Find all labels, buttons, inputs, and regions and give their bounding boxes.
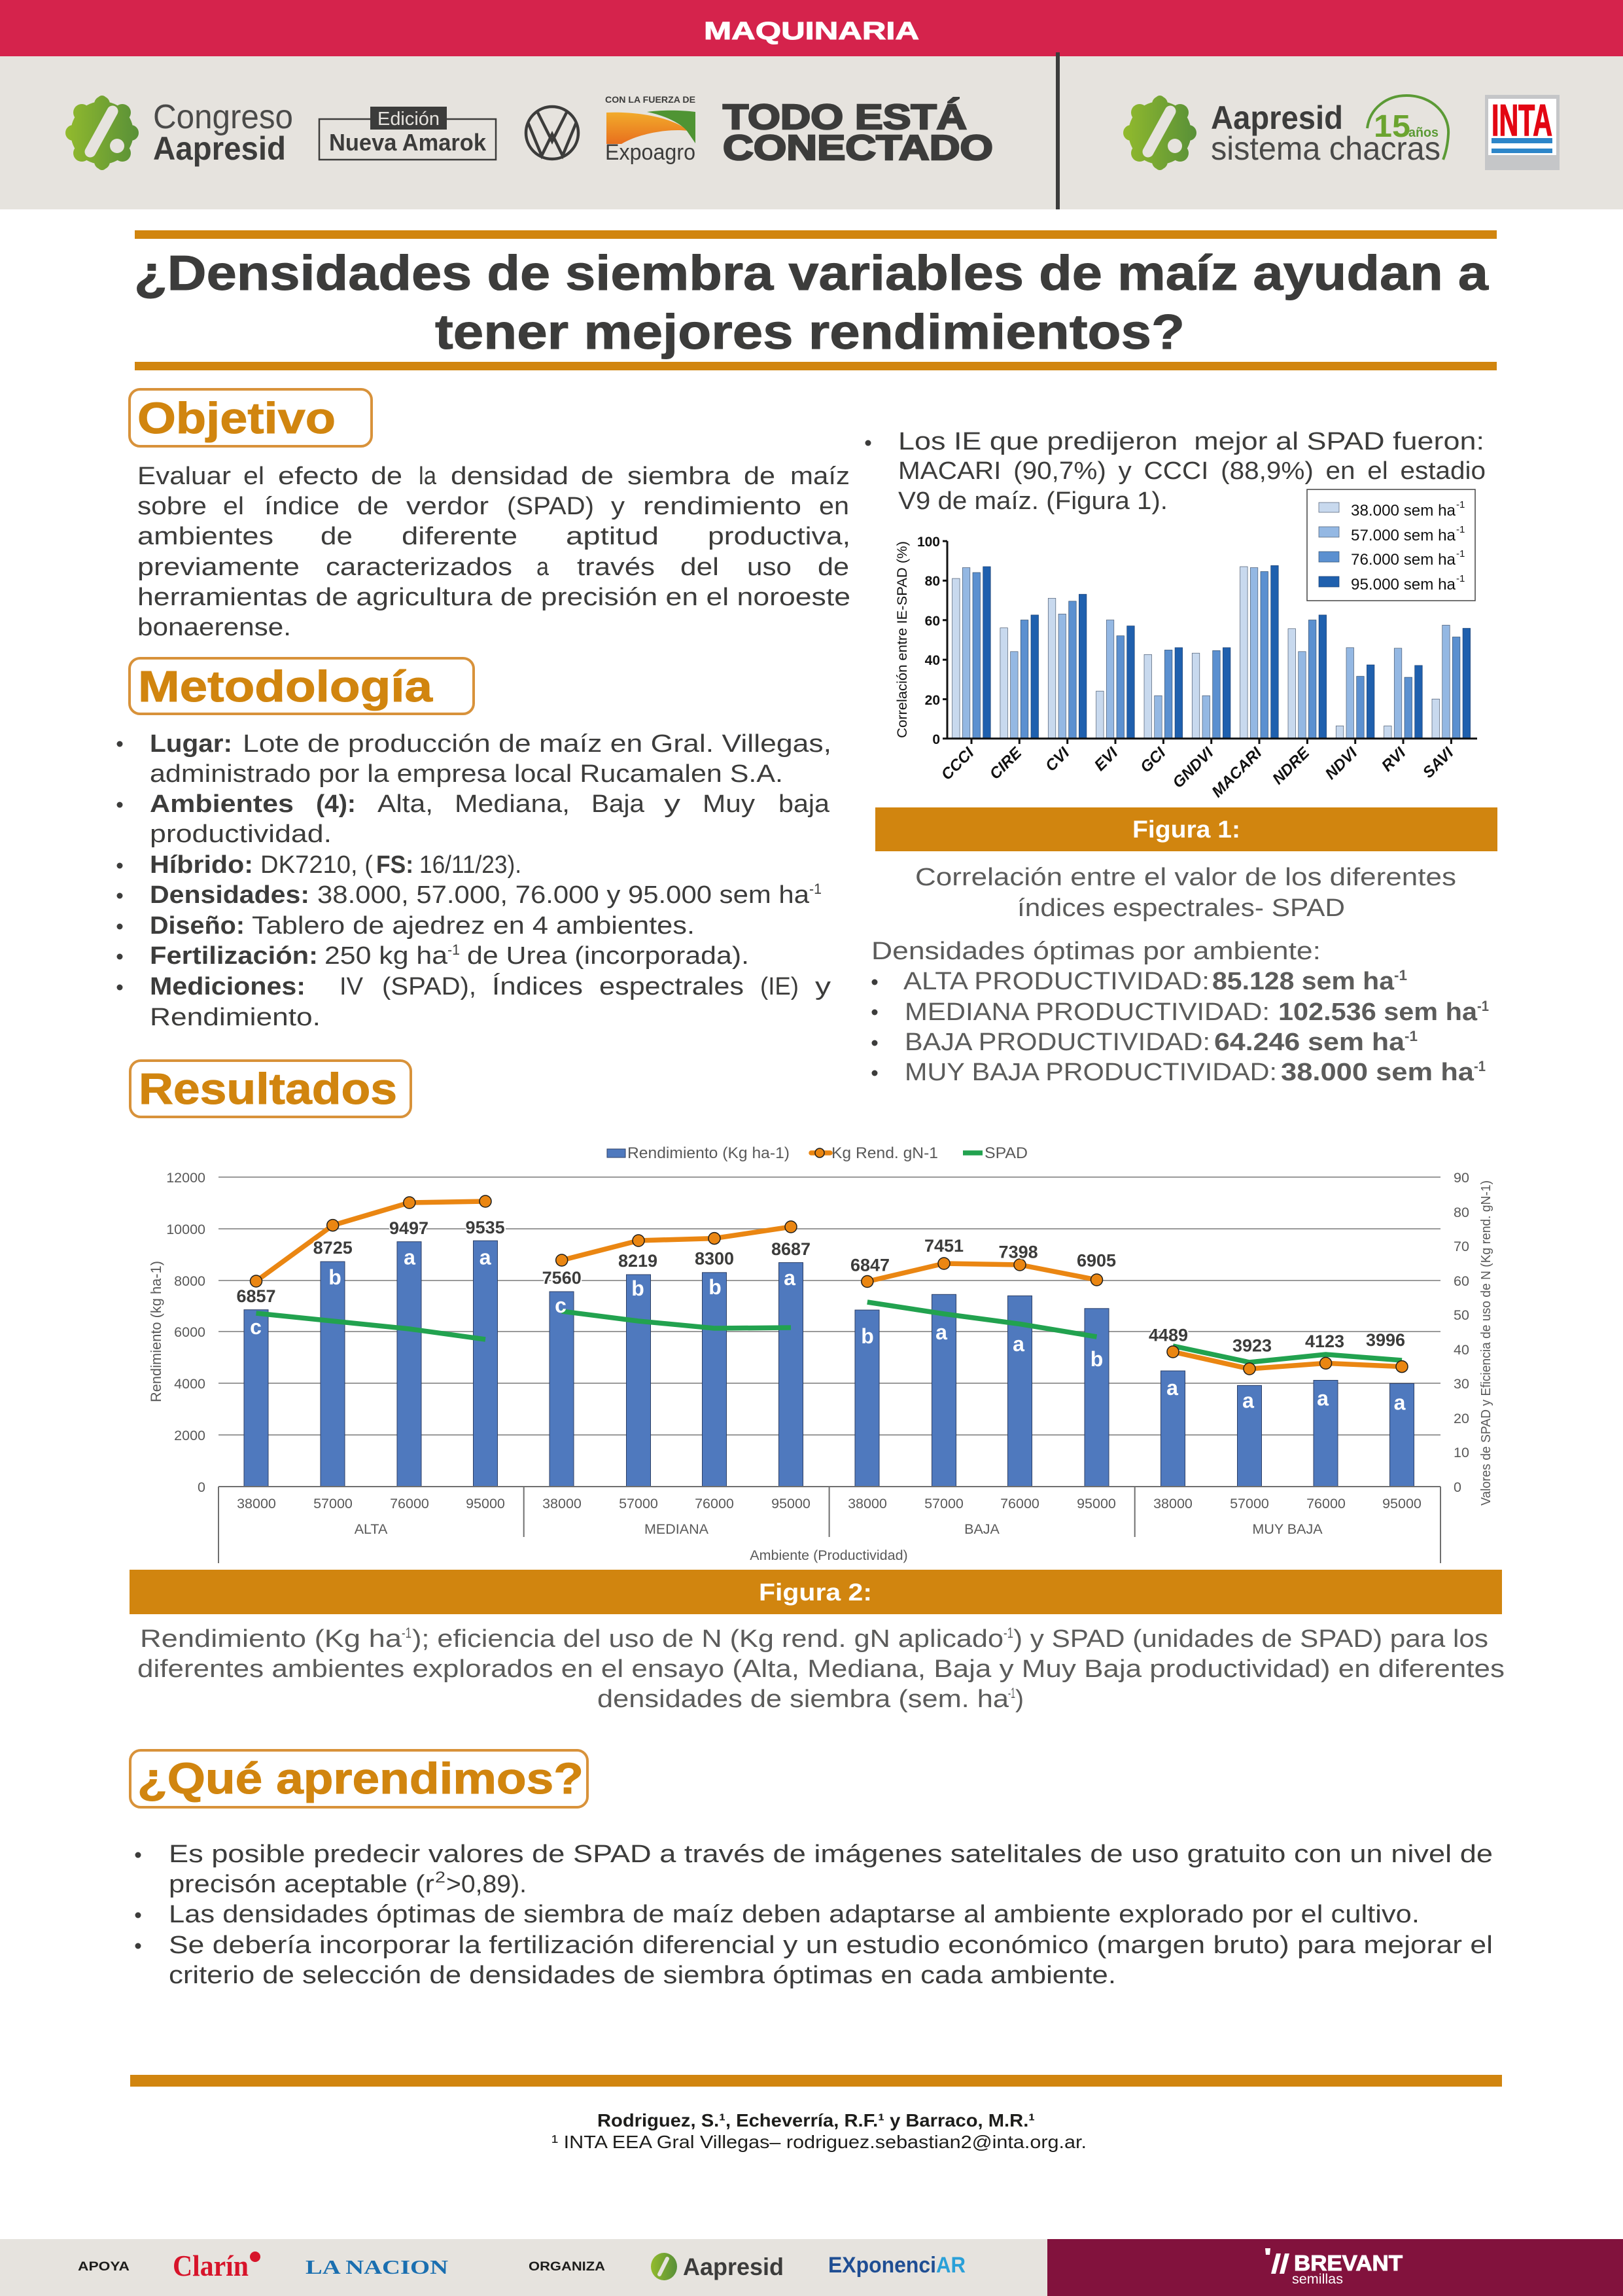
list: metodología: FS: bbox=[376, 851, 413, 879]
category labels: 38000 bbox=[237, 1496, 276, 1511]
text block: objetivo: en bbox=[819, 493, 849, 520]
text block: objetivo: siembra bbox=[627, 463, 731, 490]
y axis labels: 20 bbox=[925, 693, 940, 708]
text block: objetivo: maíz bbox=[790, 463, 850, 490]
x axis labels: RVI bbox=[1378, 743, 1410, 775]
list: metodología: y bbox=[815, 973, 831, 1000]
list: metodología: Muy bbox=[703, 790, 755, 818]
list: metodología: Baja bbox=[591, 790, 645, 818]
heading: Metodología: Metodología bbox=[138, 662, 433, 711]
x axis labels: MACARI bbox=[1208, 743, 1266, 801]
chart legend bbox=[607, 1144, 1028, 1162]
right y axis ticks: 50 bbox=[1454, 1307, 1469, 1323]
data labels: 4489 bbox=[1149, 1326, 1188, 1345]
x axis labels bbox=[938, 743, 1457, 801]
text block: objetivo: productiva, bbox=[708, 523, 850, 550]
top banner: MAQUINARIA bbox=[0, 0, 1623, 56]
caption text: Figura 2: ) bbox=[1015, 1686, 1024, 1713]
footer sponsors: Clarín bbox=[173, 2249, 249, 2282]
text block: objetivo: (SPAD) bbox=[507, 493, 594, 520]
authors: Rodriguez, S.¹, Echeverría, R.F.¹ y Barraco, M.R.¹ bbox=[597, 2110, 1035, 2130]
bars: CVI bbox=[1048, 594, 1087, 739]
top banner: MAQUINARIA: MAQUINARIA bbox=[704, 18, 919, 45]
chart legend: SPAD bbox=[985, 1144, 1028, 1162]
list: aprendizajes: Las densidades óptimas de siembra de maíz deben adaptarse al ambiente explorado por el cultivo. bbox=[169, 1901, 1420, 1928]
list: metodología: Ambientes bbox=[150, 790, 294, 818]
list: metodología: Alta, bbox=[377, 790, 433, 818]
caption bar: Figura 2 bbox=[130, 1570, 1502, 1614]
category labels: 57000 bbox=[924, 1496, 964, 1511]
footer sponsors: LA NACION bbox=[305, 2255, 448, 2278]
list: aprendizajes: criterio de selección de densidades de siembra óptimas en cada ambiente. bbox=[169, 1962, 1116, 1989]
text block: objetivo: diferente bbox=[402, 523, 517, 550]
significance letters: b bbox=[708, 1275, 722, 1299]
heading: ¿Qué aprendimos?: ¿Qué aprendimos? bbox=[137, 1754, 584, 1803]
logo: Aapresid sistema chacras 15 años: Aapresid bbox=[1211, 99, 1343, 136]
category labels: MEDIANA bbox=[644, 1521, 709, 1537]
caption text: Figura 2: ); eficiencia del uso de N (Kg rend. gN aplicado bbox=[412, 1625, 1003, 1653]
footer sponsors: AR bbox=[936, 2253, 966, 2278]
caption text: Figura 2 bbox=[137, 1625, 1505, 1713]
list: metodología: Mediciones: bbox=[150, 973, 305, 1000]
data labels: 7560 bbox=[542, 1268, 582, 1288]
logo: Expoagro bbox=[605, 94, 695, 165]
footer sponsors: ORGANIZA bbox=[529, 2260, 605, 2274]
y axis labels: 40 bbox=[925, 653, 940, 668]
authors: ¹ INTA EEA Gral Villegas– rodriguez.sebastian2@inta.org.ar. bbox=[551, 2132, 1087, 2152]
category labels: MUY BAJA bbox=[1252, 1521, 1323, 1537]
text block: índices espectrales bbox=[865, 428, 1486, 515]
category labels: BAJA bbox=[964, 1521, 1000, 1537]
data labels: 6857 bbox=[236, 1286, 276, 1306]
category labels: 76000 bbox=[1306, 1496, 1346, 1511]
bars: NDRE bbox=[1288, 615, 1327, 739]
caption text: Figura 2: diferentes ambientes explorados en el ensayo (Alta, Mediana, Baja y Muy Baja productividad) en diferentes bbox=[137, 1655, 1505, 1683]
list: aprendizajes: 2 bbox=[435, 1869, 445, 1886]
left axis title: Rendimiento (kg ha-1) bbox=[148, 1261, 164, 1402]
text block: objetivo: a bbox=[536, 554, 550, 581]
list: metodología: Mediana, bbox=[455, 790, 570, 818]
list: metodología: Tablero de ajedrez en 4 ambientes. bbox=[252, 912, 695, 940]
left y axis ticks: 4000 bbox=[174, 1376, 205, 1392]
legend: densidades bbox=[1307, 489, 1475, 601]
list: metodología: Índices bbox=[492, 972, 583, 1000]
text block: objetivo: de bbox=[357, 493, 389, 520]
data labels: 6847 bbox=[850, 1255, 890, 1275]
significance letters: a bbox=[1166, 1376, 1178, 1400]
legend: densidades: 76.000 sem ha bbox=[1351, 551, 1456, 569]
legend: densidades: 57.000 sem ha bbox=[1351, 527, 1456, 544]
text block: objetivo: sobre bbox=[137, 493, 207, 520]
bars: RVI bbox=[1384, 648, 1422, 739]
list: metodología: IV bbox=[340, 973, 364, 1000]
list: metodología: espectrales bbox=[599, 973, 744, 1000]
caption text: Figura 2: Rendimiento (Kg ha bbox=[140, 1625, 402, 1653]
right y axis ticks: 40 bbox=[1454, 1342, 1469, 1358]
x axis labels: CVI bbox=[1042, 743, 1073, 775]
footer sponsors: APOYA bbox=[78, 2260, 130, 2274]
list: metodología: 250 kg ha bbox=[324, 942, 448, 970]
logo: Congreso Aapresid bbox=[65, 96, 293, 170]
footer sponsors bbox=[0, 2239, 1623, 2296]
significance letters: c bbox=[250, 1315, 262, 1339]
y axis labels bbox=[917, 535, 940, 747]
data labels: 9497 bbox=[389, 1218, 428, 1238]
legend: densidades: 38.000 sem ha bbox=[1351, 502, 1456, 520]
caption text: Figura 2: densidades de siembra (sem. ha bbox=[597, 1686, 1009, 1713]
category labels: 38000 bbox=[1153, 1496, 1193, 1511]
bars: NDVI bbox=[1336, 648, 1374, 739]
bars: EVI bbox=[1096, 620, 1134, 739]
text block: objetivo: de bbox=[818, 554, 849, 581]
logo: TODO ESTÁ CONECTADO: TODO ESTÁ bbox=[723, 97, 967, 137]
list: aprendizajes: precisón aceptable (r bbox=[169, 1871, 434, 1898]
category labels: 76000 bbox=[695, 1496, 734, 1511]
legend: densidades: -1 bbox=[1456, 573, 1465, 584]
caption bar: Figura 1: Figura 1: bbox=[1132, 816, 1240, 843]
footer sponsors: EXponenci bbox=[828, 2253, 936, 2278]
category labels: ALTA bbox=[355, 1521, 388, 1537]
logo: INTA: INTA bbox=[1492, 96, 1552, 145]
text block: objetivo: través bbox=[577, 554, 655, 581]
legend: densidades: -1 bbox=[1456, 548, 1465, 559]
list: densidades óptimas: 38.000 sem ha bbox=[1281, 1059, 1475, 1086]
text block: objetivo: del bbox=[680, 554, 719, 581]
data labels: 3923 bbox=[1232, 1336, 1272, 1356]
category labels: 76000 bbox=[1000, 1496, 1039, 1511]
data labels: 9535 bbox=[466, 1218, 505, 1237]
category labels: 38000 bbox=[542, 1496, 582, 1511]
text block: objetivo: ambientes bbox=[137, 523, 273, 550]
text block: objetivo: de bbox=[744, 463, 775, 490]
bars: CIRE bbox=[1000, 615, 1039, 739]
right y axis ticks: 0 bbox=[1454, 1479, 1461, 1495]
significance letters: b bbox=[328, 1265, 341, 1289]
logo: Congreso Aapresid: Congreso bbox=[153, 98, 293, 136]
list: metodología: -1 bbox=[809, 881, 822, 897]
x axis labels: NDRE bbox=[1269, 743, 1314, 788]
significance letters bbox=[250, 1246, 1406, 1415]
category labels: 57000 bbox=[1230, 1496, 1269, 1511]
axis and category separators bbox=[218, 1487, 1440, 1563]
list: metodología: Rendimiento. bbox=[150, 1004, 321, 1031]
category labels: Ambiente (Productividad) bbox=[750, 1547, 908, 1563]
list: densidades óptimas: -1 bbox=[1394, 967, 1407, 983]
list: metodología: (4): bbox=[316, 790, 356, 818]
list: densidades óptimas: BAJA PRODUCTIVIDAD: bbox=[905, 1029, 1210, 1056]
left y axis ticks: 12000 bbox=[166, 1170, 205, 1186]
caption text: Figura 1: índices espectrales- SPAD bbox=[1017, 894, 1345, 922]
list: metodología bbox=[116, 730, 831, 1031]
gridlines bbox=[218, 1177, 1440, 1435]
authors bbox=[551, 2110, 1087, 2152]
heading: Objetivo bbox=[130, 389, 372, 446]
text block: objetivo: índice bbox=[264, 493, 340, 520]
logo: INTA bbox=[1485, 95, 1560, 170]
list: densidades óptimas: 64.246 sem ha bbox=[1214, 1029, 1405, 1056]
title block: tener mejores rendimientos? bbox=[435, 304, 1185, 359]
caption text: Figura 2: -1 bbox=[1003, 1625, 1013, 1641]
line: SPAD bbox=[256, 1302, 1402, 1362]
right y axis ticks: 20 bbox=[1454, 1411, 1469, 1426]
legend: densidades: -1 bbox=[1456, 524, 1465, 535]
list: metodología: Fertilización: bbox=[150, 942, 318, 970]
axes bbox=[943, 541, 1477, 744]
significance letters: a bbox=[480, 1246, 491, 1269]
text block: objetivo: previamente bbox=[137, 554, 300, 581]
x axis labels: EVI bbox=[1091, 743, 1122, 775]
significance letters: b bbox=[631, 1277, 644, 1300]
y axis labels: 60 bbox=[925, 614, 940, 629]
category labels: 76000 bbox=[390, 1496, 429, 1511]
text block: objetivo: herramientas de agricultura de precisión en el noroeste bbox=[137, 584, 850, 611]
x axis labels: GCI bbox=[1137, 743, 1170, 776]
category labels: 57000 bbox=[619, 1496, 658, 1511]
list: metodología: 38.000, 57.000, 76.000 y 95.000 sem ha bbox=[317, 881, 810, 909]
significance letters: a bbox=[404, 1246, 415, 1269]
data labels: 8687 bbox=[771, 1239, 811, 1259]
logo: Aapresid sistema chacras 15 años: sistema chacras bbox=[1211, 130, 1440, 167]
x axis labels: NDVI bbox=[1322, 743, 1361, 783]
right y axis ticks bbox=[1454, 1170, 1469, 1495]
list: metodología: de Urea (incorporada). bbox=[467, 942, 749, 970]
footer rule bbox=[130, 2075, 1502, 2087]
bars: MACARI bbox=[1240, 565, 1278, 739]
text block: objetivo: de bbox=[581, 463, 614, 490]
right y axis ticks: 60 bbox=[1454, 1273, 1469, 1289]
text block: objetivo: densidad bbox=[451, 463, 568, 490]
logo: Aapresid sistema chacras 15 años: 15 bbox=[1374, 109, 1410, 144]
text block: objetivo: bonaerense. bbox=[137, 614, 291, 641]
category labels: 95000 bbox=[466, 1496, 505, 1511]
left y axis ticks: 10000 bbox=[166, 1222, 205, 1237]
list: metodología: Lote de producción de maíz en Gral. Villegas, bbox=[243, 730, 831, 758]
footer sponsors: BREVANT bbox=[1294, 2251, 1403, 2275]
list: densidades óptimas: Densidades óptimas por ambiente: bbox=[871, 938, 1321, 965]
chart legend: Rendimiento (Kg ha-1) bbox=[627, 1144, 790, 1162]
right y axis ticks: 10 bbox=[1454, 1445, 1469, 1460]
logo: Congreso Aapresid: Aapresid bbox=[153, 130, 286, 167]
list: metodología: (IE) bbox=[760, 973, 799, 1000]
right y axis ticks: 70 bbox=[1454, 1239, 1469, 1254]
left y axis ticks: 0 bbox=[198, 1479, 205, 1495]
list: densidades óptimas: 102.536 sem ha bbox=[1278, 998, 1478, 1026]
heading: Objetivo: Objetivo bbox=[137, 394, 336, 443]
legend: densidades: -1 bbox=[1456, 499, 1465, 510]
caption bar: Figura 1 bbox=[875, 807, 1497, 851]
category labels: 95000 bbox=[1077, 1496, 1116, 1511]
significance letters: a bbox=[1317, 1386, 1329, 1410]
list: densidades óptimas: MEDIANA PRODUCTIVIDAD: bbox=[905, 998, 1270, 1026]
significance letters: c bbox=[555, 1294, 567, 1317]
list: densidades óptimas: -1 bbox=[1474, 1058, 1486, 1074]
data labels: 8300 bbox=[695, 1248, 734, 1268]
list: densidades óptimas: MUY BAJA PRODUCTIVIDAD: bbox=[905, 1059, 1277, 1086]
left y axis ticks bbox=[166, 1170, 205, 1495]
y axis labels: 0 bbox=[932, 732, 940, 747]
caption text: Figura 2: -1 bbox=[402, 1625, 411, 1641]
significance letters: a bbox=[935, 1320, 947, 1344]
significance letters: a bbox=[1394, 1391, 1406, 1415]
chart legend: Kg Rend. gN-1 bbox=[831, 1144, 938, 1162]
bars: SAVI bbox=[1432, 625, 1471, 739]
category labels: 95000 bbox=[1382, 1496, 1422, 1511]
x axis labels: CIRE bbox=[986, 743, 1026, 783]
text block: objetivo: Evaluar bbox=[137, 463, 231, 490]
y axis title: Correlación entre IE-SPAD (%) bbox=[895, 541, 910, 738]
text block: índices espectrales: MACARI (90,7%) y CCCI (88,9%) en el estadio bbox=[898, 457, 1486, 485]
logo: Volkswagen bbox=[526, 107, 578, 159]
logo: Edición Nueva Amarok: Nueva Amarok bbox=[329, 129, 487, 156]
text block: objetivo: el bbox=[243, 463, 264, 490]
bars: CCCI bbox=[952, 567, 990, 739]
list: metodología: 16/11/23). bbox=[419, 851, 521, 879]
list: densidades óptimas: -1 bbox=[1477, 998, 1489, 1014]
data labels: 6905 bbox=[1077, 1251, 1116, 1271]
heading: Metodología bbox=[130, 658, 474, 714]
significance letters: a bbox=[1013, 1332, 1024, 1356]
list: metodología: Diseño: bbox=[150, 912, 245, 940]
list: aprendizajes: >0,89). bbox=[446, 1871, 527, 1898]
caption text: Figura 2: ) y SPAD (unidades de SPAD) para los bbox=[1013, 1625, 1488, 1653]
logo: Expoagro: CON LA FUERZA DE bbox=[605, 94, 695, 105]
data labels: 8219 bbox=[618, 1251, 657, 1271]
combo chart: figura 2 bbox=[148, 1144, 1493, 1563]
x axis labels: SAVI bbox=[1420, 743, 1457, 782]
logo: TODO ESTÁ CONECTADO: CONECTADO bbox=[723, 128, 993, 168]
left y axis ticks: 6000 bbox=[174, 1324, 205, 1340]
list: metodología: DK7210, ( bbox=[260, 851, 373, 879]
data labels bbox=[236, 1218, 1405, 1356]
right y axis ticks: 80 bbox=[1454, 1205, 1469, 1220]
list: metodología: baja bbox=[778, 790, 830, 818]
list: aprendizajes bbox=[135, 1841, 1493, 1989]
data labels: 3996 bbox=[1366, 1330, 1405, 1350]
x axis labels: CCCI bbox=[938, 743, 978, 784]
list: densidades óptimas bbox=[871, 938, 1489, 1086]
list: densidades óptimas: 85.128 sem ha bbox=[1212, 968, 1395, 995]
list: metodología: Densidades: bbox=[150, 881, 309, 909]
list: metodología: y bbox=[664, 790, 680, 818]
heading: Resultados: Resultados bbox=[139, 1065, 397, 1114]
text block: objetivo: rendimiento bbox=[643, 493, 801, 520]
y axis labels: 100 bbox=[917, 535, 940, 550]
caption text: Figura 1 bbox=[915, 864, 1456, 922]
list: aprendizajes: Es posible predecir valores de SPAD a través de imágenes satelitales de uso gratuito con un nivel de bbox=[169, 1841, 1493, 1868]
caption text: Figura 1: Correlación entre el valor de los diferentes bbox=[915, 864, 1456, 891]
bars: GNDVI bbox=[1192, 648, 1230, 739]
footer sponsors: semillas bbox=[1292, 2272, 1343, 2287]
logo: Aapresid sistema chacras 15 años: años bbox=[1408, 126, 1439, 140]
list: aprendizajes: Se debería incorporar la fertilización diferencial y un estudio económico (margen bruto) para mejorar el bbox=[169, 1932, 1493, 1959]
category labels bbox=[237, 1496, 1422, 1563]
bars: GCI bbox=[1144, 648, 1183, 739]
logo: Expoagro: Expoagro bbox=[605, 140, 695, 165]
significance letters: b bbox=[1091, 1347, 1103, 1371]
data labels: 4123 bbox=[1305, 1332, 1344, 1351]
bars: rendimiento bbox=[244, 1241, 1414, 1487]
list: densidades óptimas: -1 bbox=[1405, 1028, 1418, 1044]
category labels: 38000 bbox=[848, 1496, 887, 1511]
caption text: Figura 2: -1 bbox=[1008, 1685, 1015, 1701]
text block: objetivo: el bbox=[223, 493, 244, 520]
text block: objetivo: y bbox=[611, 493, 625, 520]
line: Kg Rend. gN-1 bbox=[250, 1195, 1408, 1375]
logo: TODO ESTÁ CONECTADO bbox=[723, 97, 993, 168]
right y axis ticks: 30 bbox=[1454, 1376, 1469, 1392]
text block: objetivo: la bbox=[419, 463, 437, 490]
logo: Aapresid sistema chacras 15 años bbox=[1123, 96, 1448, 170]
list: metodología: administrado por la empresa local Rucamalen S.A. bbox=[150, 760, 783, 788]
text block: objetivo bbox=[137, 463, 850, 641]
left y axis ticks: 2000 bbox=[174, 1428, 205, 1443]
category labels: 95000 bbox=[771, 1496, 811, 1511]
list: metodología: productividad. bbox=[150, 821, 332, 848]
footer sponsors: Aapresid bbox=[683, 2253, 784, 2280]
list: metodología: -1 bbox=[447, 942, 460, 958]
list: densidades óptimas: ALTA PRODUCTIVIDAD: bbox=[903, 968, 1210, 995]
text block: objetivo: verdor bbox=[406, 493, 489, 520]
significance letters: a bbox=[784, 1266, 795, 1290]
list: metodología: Lugar: bbox=[150, 730, 232, 758]
text block: objetivo: aptitud bbox=[566, 523, 659, 550]
y axis labels: 80 bbox=[925, 574, 940, 589]
title block: ¿Densidades de siembra variables de maíz ayudan a bbox=[134, 245, 1489, 300]
caption bar: Figura 2: Figura 2: bbox=[759, 1579, 872, 1606]
logo: Edición Nueva Amarok: Edición bbox=[377, 109, 440, 130]
x axis labels: GNDVI bbox=[1169, 743, 1217, 792]
title block bbox=[134, 230, 1497, 370]
text block: índices espectrales: Los IE que predijeron mejor al SPAD fueron: bbox=[898, 428, 1484, 455]
right axis title: Valores de SPAD y Eficiencia de uso de N (Kg rend. gN-1) bbox=[1479, 1180, 1493, 1506]
list: metodología: Híbrido: bbox=[150, 851, 253, 879]
significance letters: b bbox=[861, 1324, 874, 1348]
text block: objetivo: uso bbox=[747, 554, 792, 581]
text block: objetivo: de bbox=[321, 523, 353, 550]
list: metodología: (SPAD), bbox=[382, 973, 476, 1000]
text block: índices espectrales: V9 de maíz. (Figura 1). bbox=[898, 487, 1168, 515]
left y axis ticks: 8000 bbox=[174, 1273, 205, 1289]
category labels: 57000 bbox=[313, 1496, 353, 1511]
logo: Edición Nueva Amarok bbox=[319, 107, 496, 160]
data labels: 7451 bbox=[924, 1236, 964, 1256]
header logo band bbox=[0, 52, 1623, 209]
significance letters: a bbox=[1242, 1388, 1254, 1412]
data labels: 8725 bbox=[313, 1238, 353, 1258]
data labels: 7398 bbox=[999, 1242, 1038, 1262]
text block: objetivo: caracterizados bbox=[326, 554, 512, 581]
text block: objetivo: efecto bbox=[278, 463, 358, 490]
text block: objetivo: de bbox=[371, 463, 402, 490]
legend: densidades: 95.000 sem ha bbox=[1351, 576, 1456, 593]
bar chart: figura 1 bbox=[895, 489, 1477, 801]
right y axis ticks: 90 bbox=[1454, 1170, 1469, 1186]
